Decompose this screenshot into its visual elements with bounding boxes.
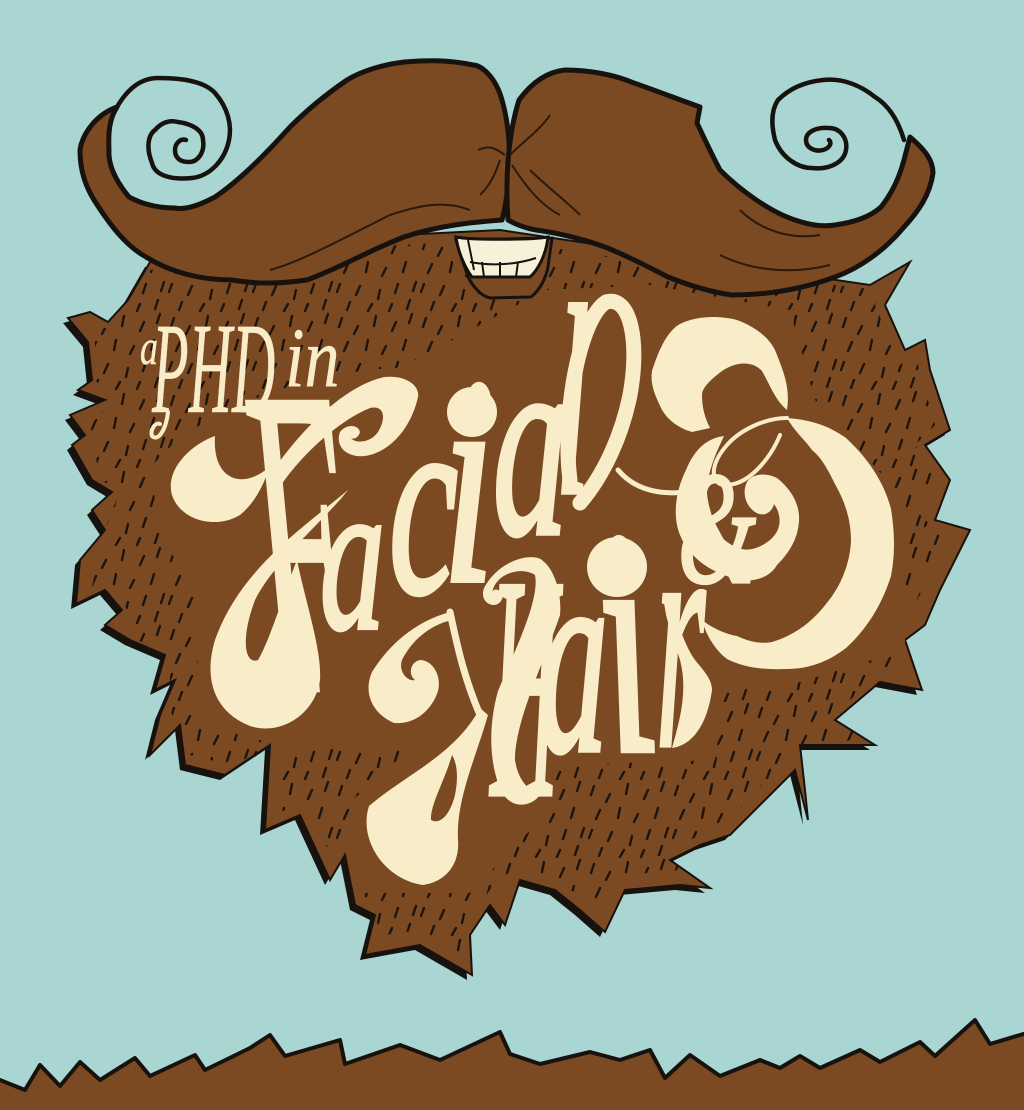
l loop <box>568 301 634 503</box>
beard fill <box>68 230 970 975</box>
ampersand glyph: & <box>678 439 756 617</box>
r flare <box>664 598 712 748</box>
ampersand large arc <box>702 418 894 669</box>
teeth <box>456 237 548 277</box>
tooth lines <box>468 240 536 277</box>
ampersand top curl <box>652 317 788 432</box>
letter a: a <box>320 435 385 675</box>
F top swash <box>268 377 418 490</box>
mustache centre strands <box>270 115 830 270</box>
letter H: H <box>489 512 563 865</box>
letter a: a <box>538 504 608 811</box>
ampersand cross stroke <box>714 418 787 485</box>
ground fur strip <box>0 1020 1024 1110</box>
H left stem <box>450 612 480 715</box>
ampersand <box>652 317 894 669</box>
chin outline <box>456 238 552 298</box>
beard shadow outline <box>63 235 965 980</box>
letter c: c <box>389 355 458 651</box>
in: in <box>285 311 339 405</box>
mouth and teeth <box>456 237 552 298</box>
left mustache half <box>80 61 510 283</box>
left curl <box>117 78 230 178</box>
mustache <box>80 61 933 298</box>
letter l: l <box>556 253 589 551</box>
letter r: r <box>655 454 706 818</box>
letter F: F <box>211 300 390 786</box>
right curl <box>772 80 904 168</box>
F lower loop <box>210 490 348 728</box>
beard <box>63 230 970 980</box>
i dot <box>587 537 647 597</box>
ampersand left bulb <box>676 436 799 580</box>
H left flourish <box>369 612 452 723</box>
clear zone behind lettering <box>150 285 905 893</box>
P tail <box>152 412 168 438</box>
letter i: i <box>442 317 495 644</box>
i dot <box>447 387 497 437</box>
H teardrop <box>367 708 488 885</box>
beard hair texture <box>90 240 950 955</box>
ampersand small swirl <box>704 389 724 408</box>
Facial <box>171 253 686 786</box>
a PhD in <box>140 296 339 440</box>
H right stem <box>483 557 560 805</box>
letter a: a <box>140 320 158 375</box>
l tail to ampersand <box>618 470 686 493</box>
letter i: i <box>572 466 675 820</box>
lettering <box>140 253 894 885</box>
PHD: PHD <box>151 296 275 440</box>
letter a: a <box>493 293 568 592</box>
right mustache half <box>507 70 933 295</box>
Hair <box>367 454 712 885</box>
F hook blob <box>171 436 270 522</box>
